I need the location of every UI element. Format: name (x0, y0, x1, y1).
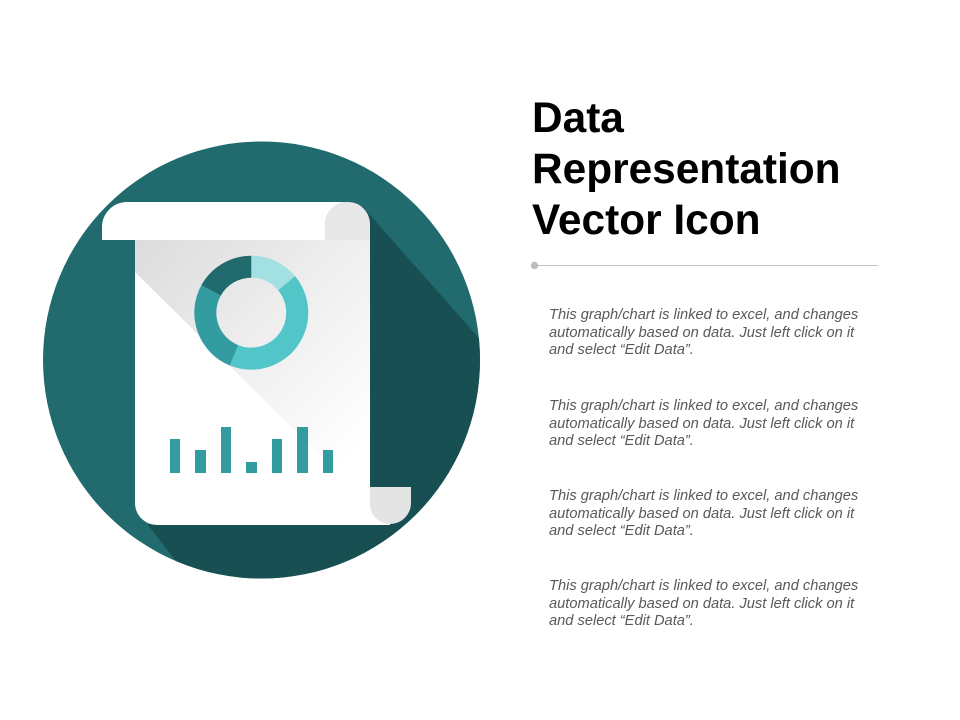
long shadow (148, 206, 480, 578)
illustration: document icon in circle (43, 142, 878, 578)
text block 3: automatically based on data. Just left click on it (549, 506, 854, 522)
donut chart (194, 256, 308, 370)
paper sheet (135, 225, 370, 525)
teal circle background (43, 142, 480, 578)
top right folded corner (325, 202, 370, 240)
segment: light (251, 256, 295, 290)
text block 2: This graph/chart is linked to excel, and changes (549, 398, 858, 414)
text block 1: automatically based on data. Just left click on it (549, 325, 854, 341)
text block 4 (549, 578, 858, 629)
divider with dot (531, 262, 878, 269)
text block 2 (549, 398, 858, 449)
bar chart (170, 427, 333, 473)
text block 1: and select “Edit Data”. (549, 342, 694, 358)
text block 2: and select “Edit Data”. (549, 433, 694, 449)
text block 4: automatically based on data. Just left click on it (549, 596, 854, 612)
text block 2: automatically based on data. Just left click on it (549, 416, 854, 432)
title: Vector Icon (532, 196, 761, 243)
text block 4: and select “Edit Data”. (549, 613, 694, 629)
text block 1 (549, 307, 858, 358)
text block 3: and select “Edit Data”. (549, 523, 694, 539)
segment: bright teal (230, 276, 308, 370)
title: Data (532, 94, 624, 141)
text block 4: This graph/chart is linked to excel, and changes (549, 578, 858, 594)
text block 3: This graph/chart is linked to excel, and changes (549, 488, 858, 504)
title: Representation (532, 145, 841, 192)
text block 3 (549, 488, 858, 539)
bottom scroll curl (370, 487, 411, 525)
segment: mid teal (194, 285, 238, 366)
paper shading (135, 240, 370, 505)
text block 1: This graph/chart is linked to excel, and changes (549, 307, 858, 323)
segment: dark teal (201, 256, 251, 296)
title (532, 94, 841, 243)
top scroll band (102, 202, 348, 240)
